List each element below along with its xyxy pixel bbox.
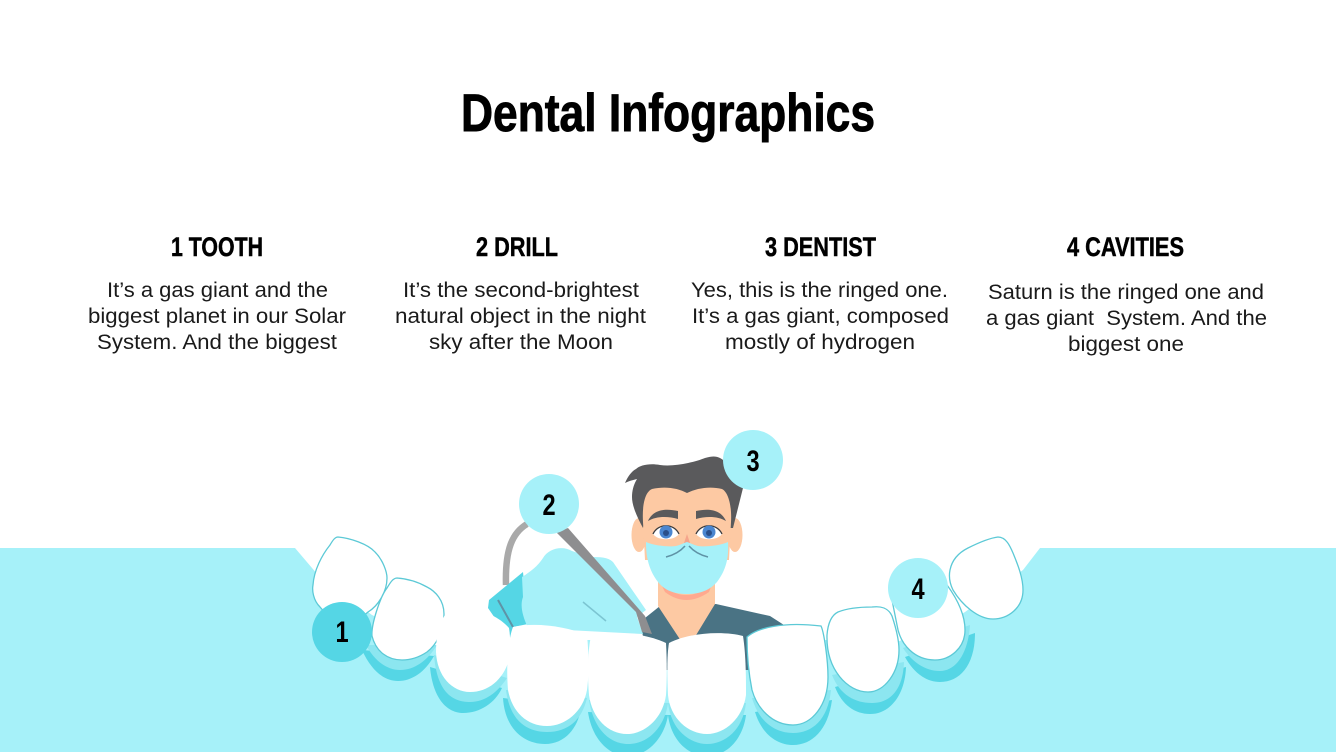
badge 1 xyxy=(312,602,372,662)
tooth E shadow xyxy=(588,712,668,752)
text block: 3 dentist xyxy=(691,232,949,354)
tooth G shadow xyxy=(755,700,832,745)
badge 3 xyxy=(723,430,783,490)
text block: 4 cavities: 4 CAVITIES xyxy=(1067,232,1184,262)
mask folds xyxy=(666,546,708,557)
dentist xyxy=(625,456,784,670)
glove xyxy=(522,548,646,634)
text block: 1 tooth: System. And the biggest xyxy=(97,330,337,354)
glove fold xyxy=(583,602,606,621)
text block: 1 tooth: 1 TOOTH xyxy=(171,232,263,262)
tooth C xyxy=(436,610,510,692)
text block: 3 dentist: Yes, this is the ringed one. xyxy=(691,278,948,302)
nose xyxy=(684,534,690,543)
badge 2: 2 xyxy=(542,488,556,522)
badge 4 xyxy=(888,558,948,618)
badge 4: 4 xyxy=(911,572,925,606)
neck shadow xyxy=(661,584,712,600)
tooth C shadow xyxy=(430,667,502,713)
tooth F gum xyxy=(668,703,746,744)
hair xyxy=(625,456,743,528)
tooth H shadow xyxy=(835,667,906,714)
tooth I xyxy=(892,585,965,660)
text block: 4 cavities: Saturn is the ringed one and xyxy=(988,280,1264,304)
mask xyxy=(646,542,728,594)
tooth G gum xyxy=(752,690,831,733)
tooth H xyxy=(827,607,899,692)
tooth B shadow xyxy=(362,650,434,681)
text block: 3 dentist: 3 DENTIST xyxy=(765,232,876,262)
tooth J xyxy=(949,537,1023,619)
text block: 2 drill: natural object in the night xyxy=(395,304,646,328)
text block: 2 drill: sky after the Moon xyxy=(429,330,613,354)
text block: 1 tooth: biggest planet in our Solar xyxy=(88,304,346,328)
tooth F shadow xyxy=(668,715,746,752)
text block: 3 dentist: mostly of hydrogen xyxy=(725,330,915,354)
face xyxy=(643,488,731,560)
tooth H gum xyxy=(832,662,904,703)
text block: 2 drill: It’s the second-brightest xyxy=(403,278,639,302)
tooth D xyxy=(507,625,588,726)
glove cuff xyxy=(488,572,528,640)
gum band xyxy=(0,548,1336,752)
badge 1: 1 xyxy=(335,615,349,649)
tooth G xyxy=(747,625,828,725)
teeth xyxy=(313,537,1023,752)
text block: 1 tooth: It’s a gas giant and the xyxy=(107,278,328,302)
text block: 2 drill: 2 DRILL xyxy=(476,232,558,262)
tooth I gum xyxy=(903,625,970,671)
text block: 4 cavities: a gas giant System. And the xyxy=(986,306,1267,330)
tooth E xyxy=(588,633,667,734)
tooth E gum xyxy=(589,700,668,744)
text block: 2 drill xyxy=(395,232,646,354)
text block: 3 dentist: It’s a gas giant, composed xyxy=(692,304,949,328)
ears xyxy=(632,518,646,552)
badge 2 xyxy=(519,474,579,534)
drill arc xyxy=(506,524,527,585)
tooth A xyxy=(313,537,387,620)
eyebrows xyxy=(648,510,678,521)
tooth B xyxy=(372,578,444,660)
tooth D shadow xyxy=(503,698,581,744)
text block: 1 tooth xyxy=(88,232,346,354)
tooth F xyxy=(667,633,746,734)
text block: 4 cavities xyxy=(986,232,1267,356)
shirt xyxy=(640,604,784,670)
badge 3: 3 xyxy=(746,444,760,478)
tooth B gum xyxy=(366,645,437,670)
cuff mark xyxy=(498,600,513,627)
tooth D gum xyxy=(506,690,587,732)
neck xyxy=(658,575,715,650)
text block: 4 cavities: biggest one xyxy=(1068,332,1184,356)
gloved hand xyxy=(488,528,652,640)
eyes xyxy=(653,526,722,539)
tooth I shadow xyxy=(905,633,975,682)
tooth C gum xyxy=(434,655,507,702)
drill tool xyxy=(556,528,652,634)
title: Dental Infographics xyxy=(461,84,875,143)
